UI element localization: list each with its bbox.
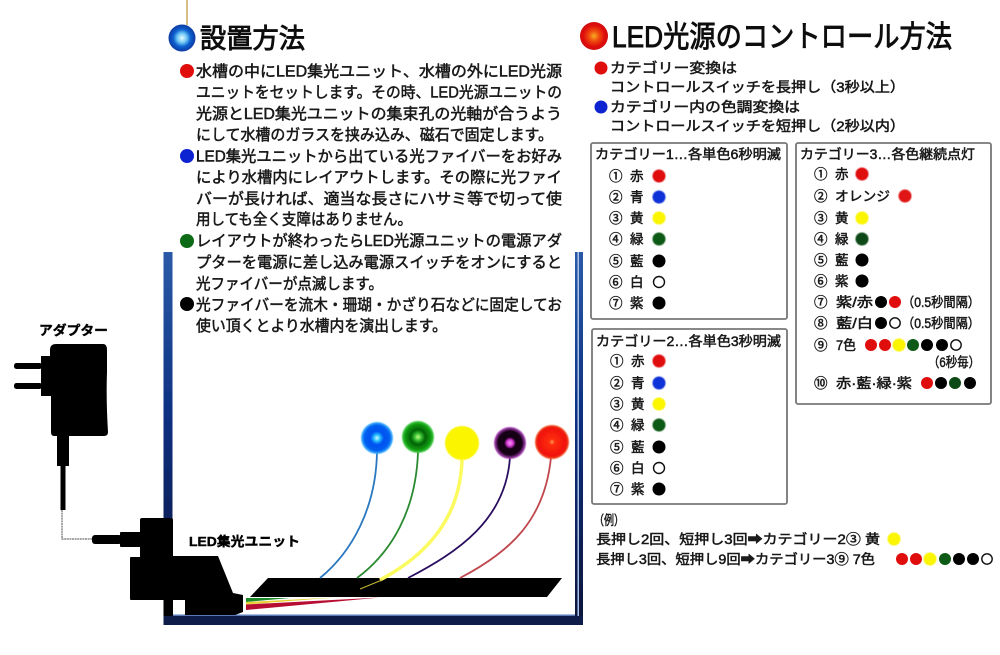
step 2 line 3: バーが長ければ、適当な長さにハサミ等で切って使: [196, 190, 562, 208]
long press line 1: カテゴリー変換は: [610, 60, 737, 76]
bullet: green: [180, 234, 194, 248]
examples: [594, 513, 992, 567]
bullet: blue: [180, 149, 194, 163]
row 1: 赤: [835, 167, 849, 182]
row 1: [610, 354, 666, 369]
row 4: [610, 418, 666, 433]
row 4: [814, 232, 868, 247]
row 4: ④: [609, 232, 623, 247]
row 5: [609, 254, 666, 269]
panel: category 1: [591, 143, 787, 319]
step 1 line 4: にして水槽のガラスを挟み込み、磁石で固定します。: [196, 126, 553, 144]
row 5: 藍: [630, 254, 644, 269]
row 9: 7色: [836, 338, 856, 353]
row 6: [610, 461, 664, 476]
text block: installation steps: [180, 62, 562, 335]
row 1: [609, 169, 666, 184]
row 7: 紫/赤: [836, 295, 874, 310]
row 7: [814, 295, 980, 310]
long press line 2: コントロールスイッチを長押し（3秒以上）: [610, 79, 905, 95]
row 9: ⑨: [814, 338, 828, 353]
row 4: 緑: [835, 232, 849, 247]
row 2: 青: [631, 376, 644, 391]
text block: control instructions: [594, 60, 905, 134]
row 10: [814, 376, 976, 391]
row 2: オレンジ: [835, 189, 890, 204]
row 7: 紫: [630, 296, 644, 311]
LED unit label: LED集光ユニット: [189, 534, 300, 549]
adapter cable: [62, 510, 92, 539]
bullet: black: [180, 297, 194, 311]
LED: blue: [361, 422, 393, 454]
LED: green: [402, 421, 434, 453]
example 2 dots: [896, 552, 992, 566]
row 5: 藍: [835, 253, 848, 268]
row 3: ③: [610, 397, 624, 412]
LED: red: [535, 425, 569, 459]
bullet: red: [594, 62, 608, 74]
row 1: ①: [610, 354, 624, 369]
row 1: [814, 167, 868, 182]
row 7: ⑦: [610, 482, 624, 497]
row 9 note: （6秒毎）: [928, 355, 980, 370]
row 2: [609, 190, 666, 205]
heading: control: LED光源のコントロール方法: [612, 21, 952, 54]
row 1: ①: [814, 167, 828, 182]
row 6: 紫: [835, 274, 848, 289]
row 4: ④: [610, 418, 624, 433]
row 9: [814, 338, 961, 353]
row 3: [814, 211, 868, 226]
step 3 line 1: レイアウトが終わったらLED光源ユニットの電源アダ: [196, 232, 562, 250]
category 1 title: カテゴリー1…各単色6秒明滅: [595, 146, 782, 162]
row 4: 緑: [631, 418, 645, 433]
row 4: ④: [814, 232, 828, 247]
row 2: ②: [609, 190, 623, 205]
example 1 text: 長押し2回、短押し3回➡カテゴリー2③ 黄: [596, 531, 880, 547]
panel: category 2: [592, 329, 787, 504]
step 4 line 2: 使い頂くとより水槽内を演出します。: [196, 317, 447, 335]
row 6: 白: [631, 461, 644, 476]
step 2 line 1: LED集光ユニットから出ている光ファイバーをお好み: [196, 148, 562, 166]
row 7: ⑦: [814, 295, 828, 310]
row 7: [609, 296, 666, 311]
row 5: ⑤: [814, 253, 828, 268]
LED: yellow: [445, 426, 479, 460]
row 5: 藍: [631, 440, 644, 455]
row 8: [814, 316, 980, 331]
row 2: ②: [814, 189, 828, 204]
fiber bundle: [246, 598, 380, 610]
row 6: ⑥: [814, 274, 828, 289]
row 6: [814, 274, 868, 289]
row 1: 赤: [630, 169, 644, 184]
row 8: 藍/白: [836, 316, 873, 331]
LED: purple: [494, 427, 526, 459]
row 3: [609, 211, 666, 226]
row 4: [609, 232, 666, 247]
example 1 dot: [888, 532, 900, 546]
bullet: blue: [594, 100, 608, 114]
row 5: ⑤: [610, 440, 624, 455]
row 3: 黄: [630, 211, 644, 226]
row 6: 白: [630, 275, 644, 290]
optical fibers: [320, 452, 551, 589]
aquarium tank: [164, 252, 583, 625]
example 2 text: 長押し3回、短押し9回➡カテゴリー3⑨ 7色: [596, 551, 875, 567]
row 7: （0.5秒間隔）: [902, 295, 980, 310]
category 3 title: カテゴリー3…各色継続点灯: [800, 146, 975, 162]
icon: red LED: [580, 22, 608, 50]
row 3: ③: [609, 211, 623, 226]
short press line 2: コントロールスイッチを短押し（2秒以内）: [610, 118, 905, 134]
row 3: 黄: [631, 397, 644, 412]
row 5: ⑤: [609, 254, 623, 269]
row 4: 緑: [630, 232, 644, 247]
row 1: ①: [609, 169, 623, 184]
row 10: ⑩: [814, 376, 828, 391]
step 1 line 2: ユニットをセットします。その時、LED光源ユニットの: [196, 84, 562, 102]
row 6: ⑥: [610, 461, 624, 476]
row 8: ⑧: [814, 316, 828, 331]
row 2: ②: [610, 376, 624, 391]
step 2 line 4: 用しても全く支障はありません。: [196, 210, 412, 228]
row 5: [814, 253, 868, 268]
step 3 line 3: 光ファイバーが点滅します。: [196, 275, 383, 293]
row 3: [610, 397, 666, 412]
step 3 line 2: プターを電源に差し込み電源スイッチをオンにすると: [196, 254, 562, 272]
adapter label: アダプター: [39, 323, 108, 338]
heading: installation: 設置方法: [200, 24, 305, 54]
examples label: （例）: [594, 513, 624, 528]
LED light source unit: [92, 518, 243, 616]
adapter silhouette: [14, 344, 108, 510]
panel: category 3: [796, 143, 991, 404]
row 7: ⑦: [609, 296, 623, 311]
row 6: [609, 275, 664, 290]
black rock bar: [250, 578, 562, 597]
row 10: 赤·藍·緑·紫: [836, 376, 912, 391]
step 1 line 3: 光源とLED集光ユニットの集束孔の光軸が合うよう: [196, 105, 562, 123]
icon: blue LED: [168, 24, 196, 52]
row 6: ⑥: [609, 275, 623, 290]
row 2: [814, 189, 912, 204]
step 2 line 2: により水槽内にレイアウトします。その際に光ファイ: [196, 168, 562, 186]
short press line 1: カテゴリー内の色調変換は: [610, 99, 800, 115]
row 2: [610, 376, 666, 391]
row 3: 黄: [835, 211, 848, 226]
category 2 title: カテゴリー2…各単色3秒明滅: [596, 333, 782, 349]
row 1: 赤: [631, 354, 645, 369]
step 4 line 1: 光ファイバーを流木・珊瑚・かざり石などに固定してお: [196, 295, 562, 314]
row 7: 紫: [631, 482, 644, 497]
top gold line: [186, 0, 188, 25]
step 1 line 1: 水槽の中にLED集光ユニット、水槽の外にLED光源: [196, 62, 562, 80]
row 3: ③: [814, 211, 828, 226]
row 5: [610, 440, 666, 455]
row 2: 青: [630, 190, 644, 205]
row 7: [610, 482, 666, 497]
bullet: red: [180, 64, 194, 78]
row 8: （0.5秒間隔）: [902, 316, 980, 331]
